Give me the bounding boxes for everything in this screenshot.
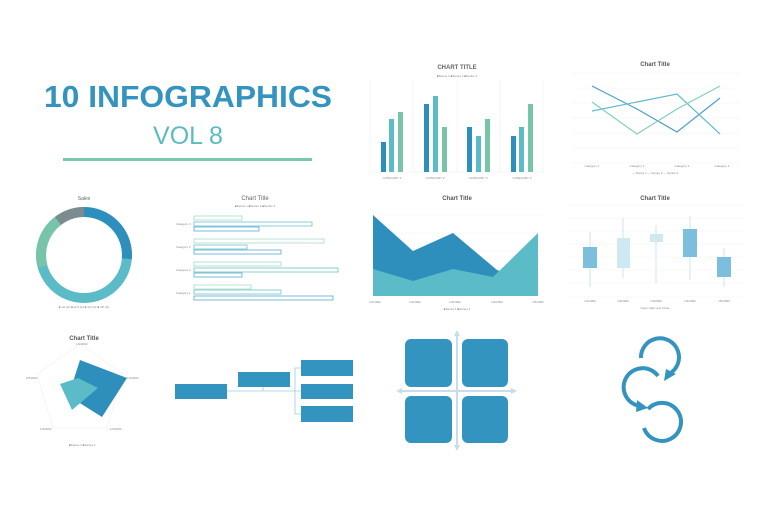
donut chart: ■ 1st Qtr ■ 2nd Qtr ■ 3rd Qtr ■ 4th Qtr xyxy=(59,305,109,309)
area chart: 1/3/2002 xyxy=(449,300,461,304)
title xyxy=(44,79,332,161)
box plot chart: Open High Low Close xyxy=(640,306,670,310)
area chart: 1/5/2002 xyxy=(532,300,544,304)
radar chart: 1/3/2002 xyxy=(110,427,122,431)
box plot chart: 1/4/2002 xyxy=(684,299,696,303)
horizontal bar chart: Category 1 xyxy=(176,291,191,295)
horizontal bar chart: ■Series 1 ■Series 2 ■Series 3 xyxy=(235,204,275,208)
horizontal bar chart: Category 2 xyxy=(176,268,191,272)
area chart: Chart Title xyxy=(442,196,472,202)
radar chart: 1/2/2002 xyxy=(127,376,139,380)
donut chart xyxy=(41,196,127,309)
column chart xyxy=(370,65,545,180)
quadrant diagram xyxy=(396,330,517,451)
radar chart: 1/4/2002 xyxy=(40,427,52,431)
box plot chart: 1/5/2002 xyxy=(718,299,730,303)
horizontal bar chart: Category 3 xyxy=(176,245,191,249)
column chart: CATEGORY 1 xyxy=(382,176,402,180)
radar chart: Chart Title xyxy=(69,336,99,342)
box plot chart: Chart Title xyxy=(640,196,670,202)
horizontal bar chart xyxy=(176,196,338,300)
box plot chart: 1/2/2002 xyxy=(617,299,629,303)
box plot chart: 1/3/2002 xyxy=(650,299,662,303)
area chart xyxy=(369,196,545,311)
area chart: ■Series 1 ■Series 2 xyxy=(444,307,471,311)
radar chart xyxy=(26,336,139,447)
donut chart: Sales xyxy=(78,196,91,202)
area chart: 1/1/2002 xyxy=(369,300,381,304)
radar chart: 1/1/2002 xyxy=(76,342,88,346)
cycle arrows xyxy=(624,338,681,441)
column chart: CHART TITLE xyxy=(437,65,477,71)
horizontal bar chart: Chart Title xyxy=(241,196,269,202)
radar chart: ■Series 1 ■Series 2 xyxy=(69,443,96,447)
title: VOL 8 xyxy=(153,122,223,150)
box plot chart: 1/1/2002 xyxy=(584,299,596,303)
column chart: CATEGORY 2 xyxy=(425,176,445,180)
horizontal bar chart: Category 4 xyxy=(176,222,191,226)
line chart xyxy=(572,62,740,175)
line chart: Category 4 xyxy=(715,164,730,168)
column chart: ■Series 1 ■Series 2 ■Series 3 xyxy=(437,74,477,78)
line chart: Category 3 xyxy=(675,164,690,168)
column chart: CATEGORY 4 xyxy=(512,176,532,180)
area chart: 1/4/2002 xyxy=(491,300,503,304)
line chart: Category 2 xyxy=(630,164,645,168)
box plot chart xyxy=(568,196,745,310)
radar chart: 1/5/2002 xyxy=(26,376,38,380)
org chart xyxy=(175,360,353,422)
line chart: Category 1 xyxy=(585,164,600,168)
column chart: CATEGORY 3 xyxy=(468,176,488,180)
title: 10 INFOGRAPHICS xyxy=(44,79,332,114)
line chart: — Series 1 — Series 2 — Series 3 xyxy=(632,171,678,175)
area chart: 1/2/2002 xyxy=(409,300,421,304)
line chart: Chart Title xyxy=(640,62,670,68)
